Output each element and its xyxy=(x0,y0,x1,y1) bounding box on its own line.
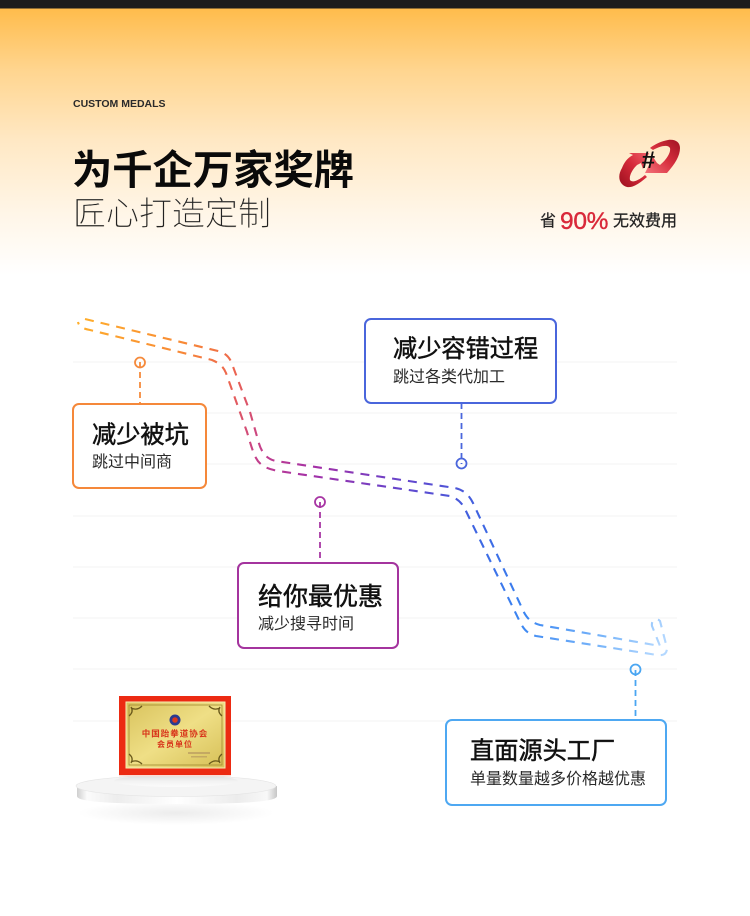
panel: direct factory xyxy=(445,719,667,806)
text: less searching time: 减少搜寻时间 xyxy=(258,616,354,633)
heading: reduce error tolerance: 减少容错过程 xyxy=(393,336,538,363)
panel: reduce pitfalls xyxy=(72,403,207,489)
savings line xyxy=(540,208,677,235)
connector: light blue xyxy=(630,664,642,716)
savings line: 90% xyxy=(560,208,608,235)
connector: blue xyxy=(456,404,468,470)
text: bigger order better price: 单量数量越多价格越优惠 xyxy=(470,771,646,788)
medal on podium xyxy=(76,696,277,820)
icon: red circular arrows with hash: # xyxy=(641,147,655,174)
connector: orange xyxy=(134,356,146,403)
text: skip agents: 跳过各类代加工 xyxy=(393,369,505,386)
medal on podium: 会员单位 xyxy=(157,739,193,749)
savings line: 无效费用 xyxy=(613,213,677,230)
connector: purple xyxy=(314,496,326,558)
panel: best discount xyxy=(237,562,399,649)
text: skip middlemen: 跳过中间商 xyxy=(92,454,172,471)
savings line: 省 xyxy=(540,213,556,230)
medal on podium: 中国跆拳道协会 xyxy=(142,728,208,738)
dashed route path xyxy=(78,319,667,655)
heading: direct factory: 直面源头工厂 xyxy=(470,738,615,765)
heading: best discount: 给你最优惠 xyxy=(258,583,383,611)
title: 为千企万家奖牌 xyxy=(72,148,354,193)
icon: red circular arrows with hash xyxy=(619,140,680,188)
panel: reduce error tolerance xyxy=(364,318,557,404)
subtitle: 匠心打造定制 xyxy=(73,195,271,232)
header band gradient xyxy=(0,0,750,280)
heading: reduce pitfalls: 减少被坑 xyxy=(92,422,189,449)
eyebrow text: CUSTOM MEDALS xyxy=(73,98,166,110)
